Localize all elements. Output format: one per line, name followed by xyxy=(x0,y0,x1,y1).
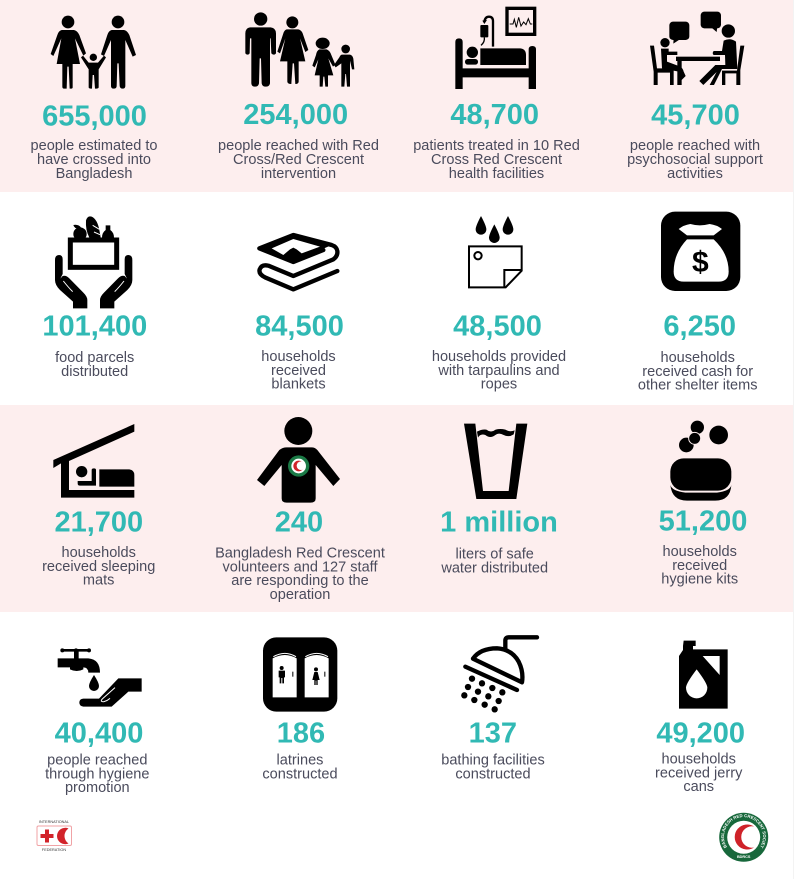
description: blankets xyxy=(271,377,326,393)
stat: 40,400 hygiene promotion xyxy=(45,648,149,796)
icon: two people talking at a table xyxy=(650,12,744,85)
panel: row 2, food and shelter xyxy=(42,212,758,394)
number: 254,000 xyxy=(243,99,348,131)
description: Bangladesh Red Crescent xyxy=(215,546,385,562)
description: received sleeping xyxy=(42,559,155,575)
description: households xyxy=(61,545,136,561)
description: are responding to the xyxy=(231,573,369,589)
description: households provided xyxy=(432,349,566,365)
stat: 1 million liters xyxy=(440,424,558,576)
description: patients treated in 10 Red xyxy=(413,138,580,154)
stat: 51,200 hygiene kits xyxy=(659,421,747,588)
number: 186 xyxy=(277,718,325,750)
number: 51,200 xyxy=(659,506,747,538)
number: 6,250 xyxy=(663,310,736,342)
stat: 45,700 psychosocial support xyxy=(627,12,763,182)
description: households xyxy=(660,350,735,366)
panel: row 1, people reached and health xyxy=(0,0,794,192)
stat: 254,000 people reached xyxy=(218,12,379,182)
icon: money bag xyxy=(661,212,740,291)
description: households xyxy=(661,752,736,768)
icon: shower head xyxy=(461,637,537,712)
stat: 137 bathing facilities xyxy=(441,637,545,782)
stat: 84,500 blankets xyxy=(255,235,344,393)
description: constructed xyxy=(262,766,338,782)
description: Cross Red Crescent xyxy=(431,152,562,168)
icon: jerry can xyxy=(679,641,728,709)
icon: tap and hand xyxy=(58,648,142,707)
icon: family of four xyxy=(245,12,354,87)
number: 137 xyxy=(469,718,517,750)
IFRC emblem box xyxy=(37,826,72,846)
icon: person sleeping under shelter xyxy=(53,424,134,498)
description: food parcels xyxy=(55,350,134,366)
BDRCS bottom lettering: BDRCS xyxy=(737,855,751,859)
description: health facilities xyxy=(449,166,544,182)
description: water distributed xyxy=(440,560,548,576)
number: 48,500 xyxy=(453,310,542,342)
BDRCS ring lettering: BANGLADESH RED CRESCENT SOCIETY xyxy=(721,814,766,848)
description: liters of safe xyxy=(455,547,534,563)
number: 101,400 xyxy=(42,310,147,342)
right page edge xyxy=(793,0,794,879)
description: constructed xyxy=(455,766,531,782)
icon: volunteer with crescent emblem xyxy=(257,417,340,503)
description: Bangladesh xyxy=(56,166,132,182)
number: 1 million xyxy=(440,506,558,538)
number: 21,700 xyxy=(54,506,143,538)
BDRCS green ring xyxy=(719,813,768,862)
description: have crossed into xyxy=(37,152,151,168)
description: people reached with xyxy=(630,138,760,154)
description: other shelter items xyxy=(638,378,758,394)
stat: 101,400 food parcels xyxy=(42,216,147,380)
description: operation xyxy=(270,587,330,603)
stat: 655,000 people crossed xyxy=(31,16,157,182)
description: latrines xyxy=(277,753,323,769)
BDRCS crescent xyxy=(735,824,754,850)
icon: hospital bed with monitor xyxy=(455,7,536,89)
BDRCS white centre xyxy=(727,821,760,854)
number: 49,200 xyxy=(656,718,745,750)
icon: glass of water xyxy=(464,424,527,499)
stat: 240 volunteers xyxy=(215,417,385,603)
description: households xyxy=(261,349,336,365)
panel: row 3, mats, staff, water, hygiene xyxy=(0,405,794,612)
stat: 48,500 tarpaulins xyxy=(432,216,566,393)
description: people reached with Red xyxy=(218,138,379,154)
description: volunteers and 127 staff xyxy=(222,559,378,575)
description: Cross/Red Crescent xyxy=(233,152,364,168)
description: hygiene kits xyxy=(661,572,738,588)
stat: 6,250 cash xyxy=(638,212,758,394)
number: 240 xyxy=(275,506,323,538)
icon: hands holding food parcel xyxy=(55,216,132,308)
description: received jerry xyxy=(655,765,743,781)
stat: 21,700 sleeping mats xyxy=(42,424,155,589)
number: 45,700 xyxy=(651,100,740,132)
description: people reached xyxy=(47,753,147,769)
description: received xyxy=(672,558,727,574)
number: 655,000 xyxy=(42,100,147,132)
description: households xyxy=(662,544,737,560)
icon: tarpaulin with rain drops xyxy=(469,216,522,287)
description: received xyxy=(271,363,326,379)
icon: soap with bubbles xyxy=(670,421,731,501)
description: people estimated to xyxy=(31,138,157,154)
description: activities xyxy=(667,166,723,182)
number: 48,700 xyxy=(450,99,539,131)
number: 40,400 xyxy=(55,718,143,750)
icon: family of three xyxy=(51,16,136,89)
description: intervention xyxy=(261,166,336,182)
stat: 186 latrines xyxy=(262,637,338,782)
description: mats xyxy=(83,573,114,589)
description: ropes xyxy=(481,377,517,393)
logo: International Federation xyxy=(37,820,72,852)
stat: 48,700 patients xyxy=(413,7,580,182)
panel: row 4, sanitation xyxy=(45,637,745,796)
stat: 49,200 jerry cans xyxy=(655,641,745,795)
BDRCS ring path xyxy=(724,817,763,847)
IFRC label top: INTERNATIONAL xyxy=(39,820,69,824)
description: with tarpaulins and xyxy=(437,363,560,379)
icon: latrines male and female xyxy=(263,637,337,712)
description: promotion xyxy=(65,780,130,796)
row 3 pink band xyxy=(0,405,794,612)
IFRC label bottom: FEDERATION xyxy=(42,848,66,852)
description: psychosocial support xyxy=(627,152,763,168)
icon: money bag: $ xyxy=(692,246,709,279)
description: distributed xyxy=(61,364,128,380)
description: received cash for xyxy=(642,364,753,380)
icon: folded blankets xyxy=(259,235,337,289)
description: bathing facilities xyxy=(441,753,545,769)
description: cans xyxy=(683,779,714,795)
description: through hygiene xyxy=(45,766,149,782)
row 1 pink band xyxy=(0,0,794,192)
number: 84,500 xyxy=(255,310,344,342)
